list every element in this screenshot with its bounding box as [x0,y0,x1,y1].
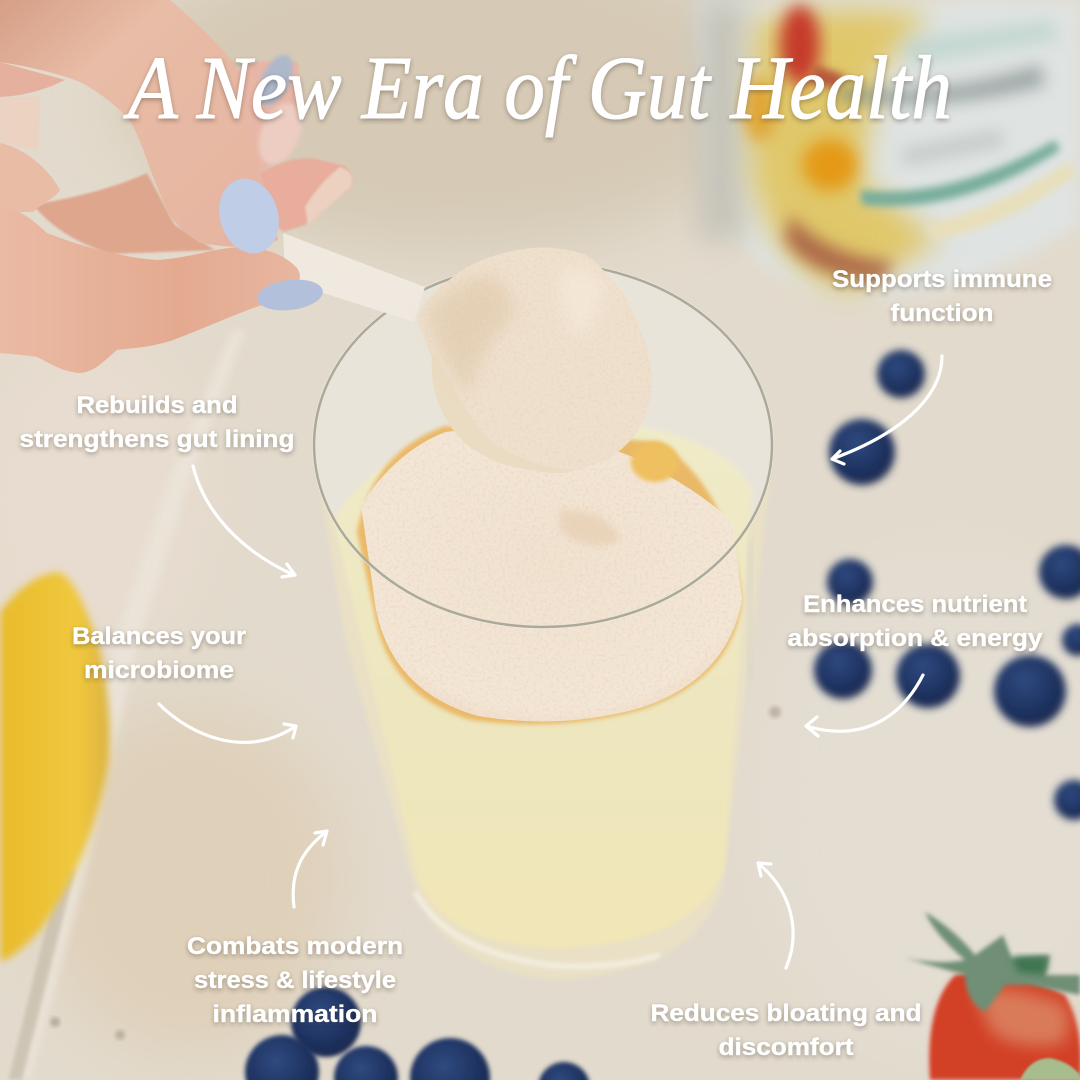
arrow: immune to berry [832,356,942,464]
fingernails [210,171,288,261]
arrow: absorption to glass [806,675,923,736]
orange rim of powder [357,426,742,724]
strawberry [905,912,1080,1080]
label: supports immune function [832,266,1052,327]
label: combats inflammation [187,933,403,1028]
label: combats inflammation: stress & lifestyle [194,967,396,994]
title: A New Era of Gut Health [123,39,952,138]
label: reduces bloating [650,1000,922,1061]
powder raft [361,429,742,721]
label: enhances nutrient absorption: absorption & energy [788,625,1043,652]
left fingers [0,97,40,150]
label: balances microbiome: microbiome [84,657,234,684]
blueberries [245,350,1080,1080]
drink [333,418,752,948]
powder mound [417,248,652,470]
label: supports immune function: function [890,300,994,327]
thumb and palm [0,207,300,373]
scoop bowl [417,320,612,473]
product tub (blurred, top right) [695,0,1080,300]
label: rebuilds gut lining: strengthens gut lining [20,426,294,453]
label: reduces bloating: discomfort [718,1034,854,1061]
arrow: bloating to glass [758,863,793,968]
arrow: microbiome to glass [159,704,296,742]
glass rim [313,262,773,628]
glass body [318,480,770,980]
label: rebuilds gut lining [20,392,294,453]
index finger [0,0,278,247]
label: enhances nutrient absorption [788,591,1043,652]
label: rebuilds gut lining: Rebuilds and [76,392,238,419]
glass interior [313,262,773,628]
label: combats inflammation: Combats modern [187,933,403,960]
label: combats inflammation: inflammation [212,1001,378,1028]
arrow: inflammation to glass [293,831,327,907]
scoop with powder [283,233,652,473]
scoop handle [283,233,425,322]
label: enhances nutrient absorption: Enhances nutrient [803,591,1027,618]
label: balances microbiome: Balances your [72,623,246,650]
label: supports immune function: Supports immune [832,266,1052,293]
label: balances microbiome [72,623,246,684]
glass of drink [313,262,773,980]
hand holding scoop [0,0,353,373]
banana [0,572,110,962]
arrow: gut lining to glass [193,466,295,577]
middle finger with nail [258,158,353,232]
label: reduces bloating: Reduces bloating and [650,1000,922,1027]
back finger with nails [240,61,300,172]
